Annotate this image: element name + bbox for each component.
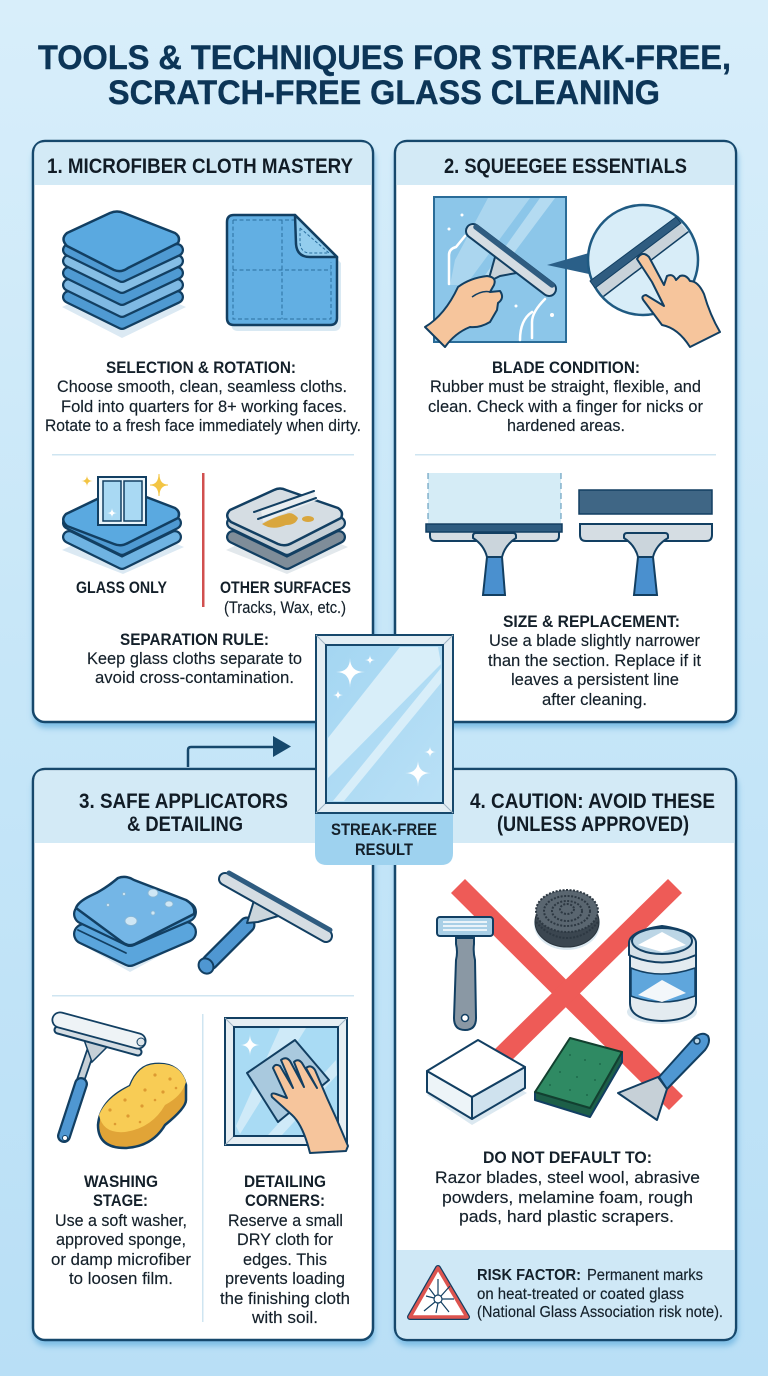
text: detailing corners: CORNERS:: [245, 1191, 325, 1210]
text: detailing corners: DETAILING: [244, 1172, 326, 1191]
text: washing stage: Use a soft washer,: [55, 1211, 187, 1230]
text: blade condition: [428, 358, 703, 435]
text: size and replacement: Use a blade slightly narrower: [489, 631, 700, 650]
icon: dark worn blade above squeegee: [579, 490, 712, 595]
icon: small window: [98, 477, 146, 525]
text: do not default to: powders, melamine foam, rough: [442, 1188, 693, 1207]
icon: damp microfiber cloth: [74, 877, 198, 972]
text: washing stage: [51, 1172, 191, 1288]
text: washing stage: WASHING: [84, 1172, 158, 1191]
text: size and replacement: [488, 612, 701, 709]
panel: squeegee essentials: [395, 141, 738, 728]
text: selection and rotation: SELECTION & ROTATION:: [106, 358, 296, 377]
labels: cloth categories: GLASS ONLY: [76, 578, 168, 597]
icon: squeegee on wet glass held by hand: [425, 197, 566, 347]
panel: safe applicators and detailing: [33, 769, 375, 1346]
icon: steel wool: [534, 890, 600, 950]
text: detailing corners: prevents loading: [225, 1269, 345, 1288]
label: streak-free result: STREAK-FREE: [331, 820, 437, 839]
text: risk note: RISK FACTOR:: [477, 1267, 581, 1284]
text: detailing corners: edges. This: [243, 1250, 327, 1269]
icon: warning triangle with cracked glass: [410, 1268, 467, 1317]
icon: correctly sized squeegee against section: [426, 473, 562, 595]
text: selection and rotation: [45, 358, 361, 435]
icon: yellow sponge: [98, 1064, 186, 1148]
labels: cloth categories: [76, 578, 351, 617]
callout: risk factor: [396, 1250, 735, 1339]
label: streak-free result: [315, 812, 453, 865]
labels: cloth categories: OTHER SURFACES: [220, 578, 351, 597]
title: [38, 39, 731, 112]
icon: razor: [437, 917, 493, 1030]
text: size and replacement: after cleaning.: [542, 690, 647, 709]
heading 3: & DETAILING: [127, 812, 243, 836]
icon: abrasive powder jar: [627, 926, 697, 1024]
text: blade condition: BLADE CONDITION:: [492, 358, 640, 377]
text: risk note: [477, 1267, 723, 1321]
text: blade condition: Rubber must be straight, flexible, and: [430, 377, 701, 396]
heading 1: 1. MICROFIBER CLOTH MASTERY: [47, 154, 353, 178]
icon: folded cloth with quarter stitching: [227, 215, 341, 331]
text: detailing corners: Reserve a small: [228, 1211, 343, 1230]
icon: stacked cloths: [62, 212, 186, 338]
text: blade condition: hardened areas.: [507, 416, 625, 435]
icon: other-surfaces grey cloth stack: [226, 488, 348, 574]
icon: green scouring pad: [535, 1038, 622, 1117]
text: separation rule: avoid cross-contamination.: [95, 668, 294, 687]
text: separation rule: SEPARATION RULE:: [120, 630, 269, 649]
heading 4: [470, 789, 715, 836]
icon: hand wiping window corner: [225, 1018, 348, 1153]
text: risk note: on heat-treated or coated glass: [477, 1286, 684, 1303]
text: do not default to: [435, 1148, 700, 1226]
text: size and replacement: leaves a persistent line: [511, 670, 679, 689]
text: do not default to: Razor blades, steel wool, abrasive: [435, 1168, 700, 1187]
labels: cloth categories: (Tracks, Wax, etc.): [224, 598, 346, 617]
text: size and replacement: SIZE & REPLACEMENT:: [503, 612, 680, 631]
title: SCRATCH-FREE GLASS CLEANING: [108, 74, 660, 112]
arrow: flow to result: [188, 736, 291, 767]
text: do not default to: pads, hard plastic scrapers.: [459, 1207, 674, 1226]
heading 4: 4. CAUTION: AVOID THESE: [470, 789, 715, 813]
text: washing stage: to loosen film.: [69, 1269, 173, 1288]
icon: melamine foam block: [427, 1040, 527, 1125]
arrow: zoom pointer to detail: [547, 253, 589, 274]
panel: microfiber cloth mastery: [33, 141, 375, 728]
icon: squeegee: [195, 873, 330, 977]
text: blade condition: clean. Check with a finger for nicks or: [428, 397, 703, 416]
icon: soft washer: [58, 1020, 145, 1140]
heading 2: 2. SQUEEGEE ESSENTIALS: [444, 154, 687, 178]
divider: red separator: [202, 473, 204, 607]
center: streak-free window: [315, 635, 453, 865]
text: separation rule: [87, 630, 302, 687]
icon: finger testing blade in magnified circle: [588, 205, 720, 347]
heading 3: 3. SAFE APPLICATORS: [79, 789, 288, 813]
text: selection and rotation: Choose smooth, clean, seamless cloths.: [57, 377, 347, 396]
icon: hard scraper: [618, 1034, 709, 1120]
text: detailing corners: the finishing cloth: [220, 1289, 350, 1308]
text: risk note: Permanent marks: [587, 1267, 703, 1284]
title: TOOLS & TECHNIQUES FOR STREAK-FREE,: [38, 39, 731, 77]
window frame: [316, 635, 453, 813]
text: separation rule: Keep glass cloths separate to: [87, 649, 302, 668]
panel: caution avoid these: [395, 769, 738, 1346]
text: selection and rotation: Fold into quarters for 8+ working faces.: [61, 397, 347, 416]
text: size and replacement: than the section. Replace if it: [488, 651, 701, 670]
text: washing stage: approved sponge,: [56, 1230, 186, 1249]
icon: glass-only cloth stack: [62, 474, 184, 574]
text: detailing corners: with soil.: [251, 1308, 318, 1327]
heading 3: [79, 789, 288, 836]
text: do not default to: DO NOT DEFAULT TO:: [483, 1148, 652, 1167]
icon: red prohibition cross: [451, 879, 683, 1110]
text: washing stage: STAGE:: [93, 1191, 148, 1210]
text: detailing corners: [220, 1172, 350, 1327]
heading 4: (UNLESS APPROVED): [497, 812, 689, 836]
text: detailing corners: DRY cloth for: [237, 1230, 333, 1249]
text: selection and rotation: Rotate to a fresh face immediately when dirty.: [45, 416, 361, 435]
text: risk note: (National Glass Association risk note).: [477, 1304, 723, 1321]
text: washing stage: or damp microfiber: [51, 1250, 191, 1269]
label: streak-free result: RESULT: [355, 840, 414, 859]
